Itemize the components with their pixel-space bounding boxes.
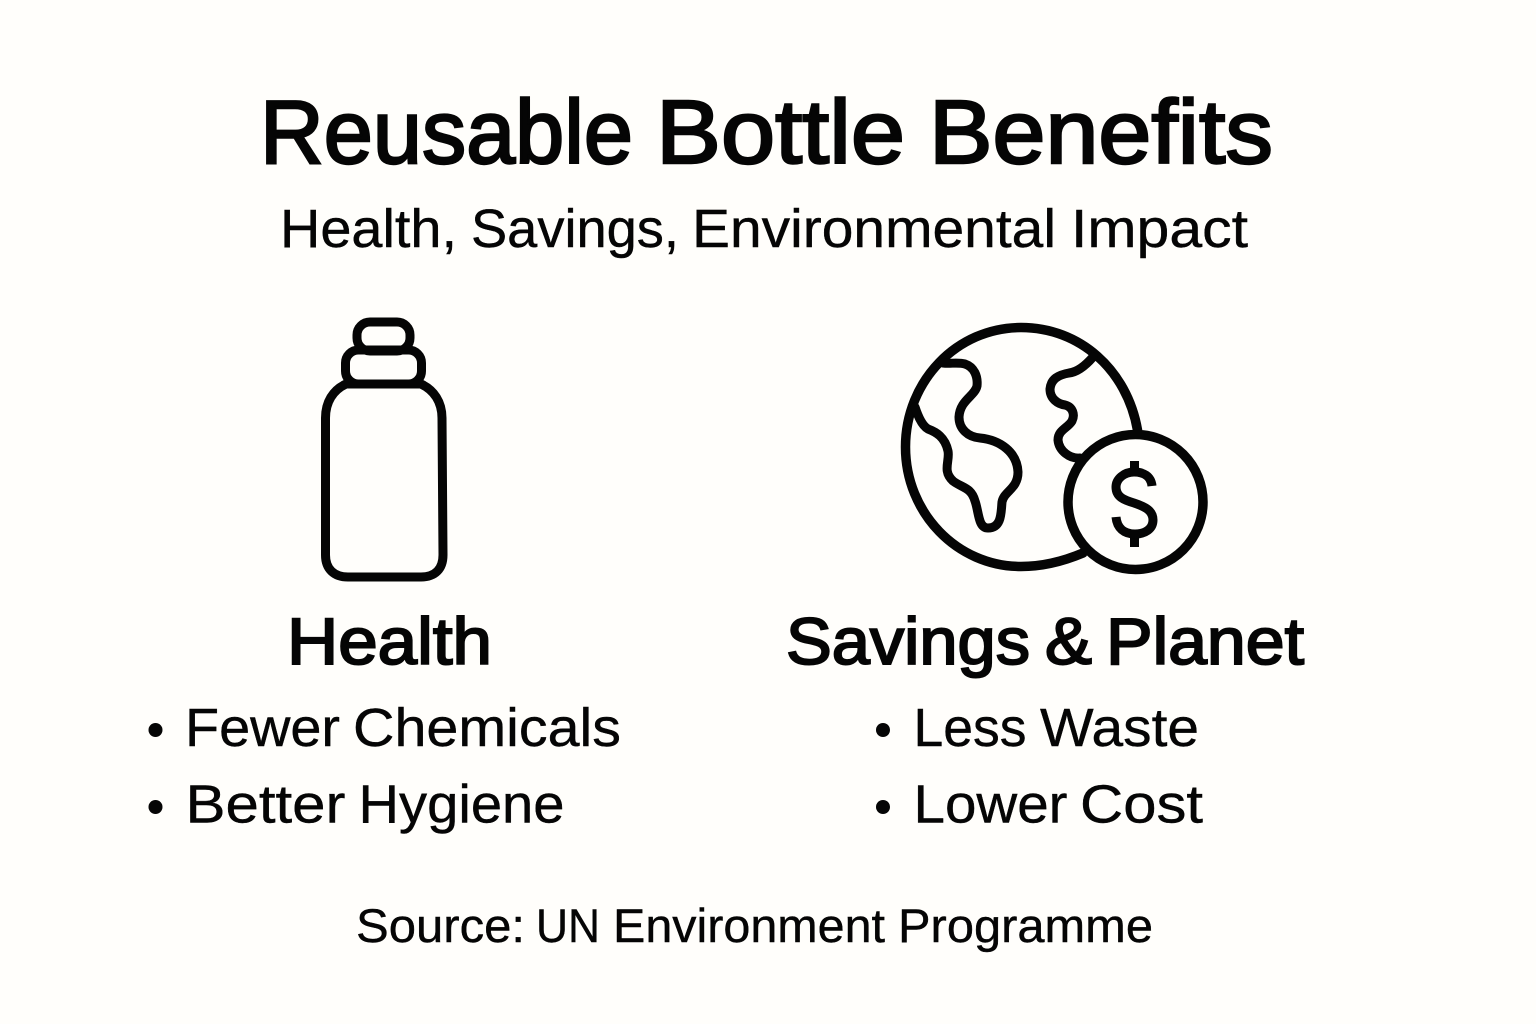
subtitle xyxy=(280,199,1248,259)
globe outline xyxy=(906,328,1138,566)
heading: savings and planet xyxy=(786,604,1304,678)
title xyxy=(260,83,1273,183)
source: Environment xyxy=(613,899,885,952)
subtitle: Health, xyxy=(280,199,457,259)
list: savings and planet: Less xyxy=(914,698,1026,758)
list: health xyxy=(148,698,621,834)
list: health: Better xyxy=(186,774,346,834)
list: health: Chemicals xyxy=(353,698,621,758)
coin xyxy=(1068,434,1203,570)
title: Reusable xyxy=(260,83,633,183)
icon: bottle xyxy=(326,322,443,577)
subtitle: Savings, xyxy=(471,199,679,259)
list: health: Fewer xyxy=(185,698,340,758)
subtitle: Environmental xyxy=(692,199,1056,259)
source: UN xyxy=(536,899,600,952)
right continent xyxy=(1050,357,1093,458)
heading: savings and planet: Savings xyxy=(786,604,1030,678)
heading: savings and planet: & xyxy=(1045,604,1092,678)
source xyxy=(356,899,1153,952)
heading: savings and planet: Planet xyxy=(1106,604,1304,678)
subtitle: Impact xyxy=(1071,199,1248,259)
title: Bottle xyxy=(656,83,905,183)
list: health: Hygiene xyxy=(358,774,564,834)
icon: globe with dollar coin xyxy=(906,328,1203,570)
title: Benefits xyxy=(929,83,1273,183)
left continent xyxy=(915,363,1018,528)
heading: health: Health xyxy=(287,604,492,678)
list: savings and planet: Waste xyxy=(1040,698,1199,758)
source: Source: xyxy=(356,899,525,952)
list: savings and planet: Lower xyxy=(914,774,1068,834)
source: Programme xyxy=(898,899,1153,952)
list: savings and planet: Cost xyxy=(1080,774,1203,834)
dollar sign xyxy=(1116,461,1153,547)
list: savings and planet xyxy=(876,698,1203,834)
